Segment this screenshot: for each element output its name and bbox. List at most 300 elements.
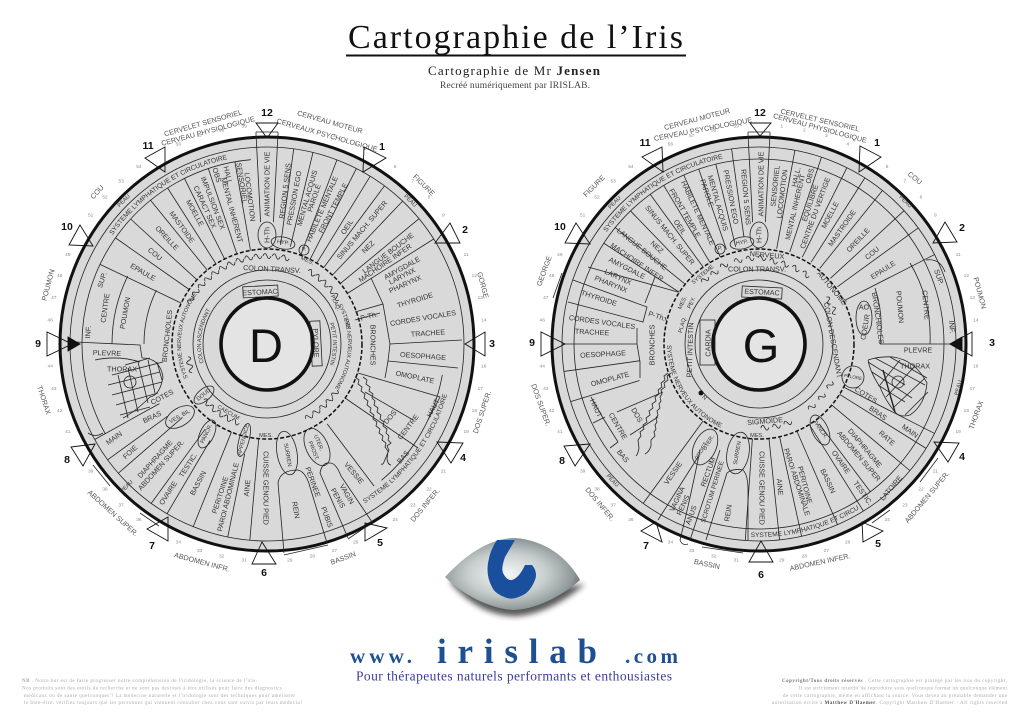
hour numbers: 3 xyxy=(989,337,995,349)
zone labels: organs: CARDIA xyxy=(704,329,712,357)
collarette wave xyxy=(700,255,838,431)
disclaimer note: NB . Notre but est de faire progresser notre compréhension de l'iridologie, la science de l'iris. xyxy=(22,679,257,684)
minute numbers: 46 xyxy=(48,318,53,324)
zone labels: organs: TRACHEE xyxy=(575,327,610,337)
minute numbers: 9 xyxy=(442,212,445,218)
minute numbers: 41 xyxy=(557,429,563,435)
zone labels: organs: SUP. xyxy=(932,268,946,286)
minute numbers: 29 xyxy=(779,557,785,563)
minute numbers: 13 xyxy=(478,295,483,301)
hour numbers: 2 xyxy=(462,224,468,236)
zone labels: organs: CENTRE xyxy=(607,411,629,441)
zone labels: organs: AUTONOME xyxy=(815,269,849,307)
outer region labels: DOS INFER. xyxy=(583,485,617,523)
hour triangles xyxy=(47,123,485,564)
zigzag descending colon lines xyxy=(355,377,391,465)
brand URL xyxy=(350,632,678,671)
hour numbers: 8 xyxy=(559,455,565,467)
minute numbers: 3 xyxy=(825,133,828,139)
outer region labels: CERVEAU PSYCHOLOGIQUE xyxy=(653,115,753,143)
zone labels: small: SURREN xyxy=(733,441,743,465)
minute numbers: 21 xyxy=(441,469,446,475)
zone labels: organs: MACHOIRE INFER xyxy=(609,241,665,283)
minute numbers: 3 xyxy=(333,133,336,139)
minute numbers: 26 xyxy=(353,540,359,546)
credit line: Recréé numériquement par IRISLAB. xyxy=(440,81,590,91)
zone labels: organs: H-Th xyxy=(262,227,272,243)
hour numbers: 5 xyxy=(377,537,383,549)
minute numbers: 26 xyxy=(845,540,851,546)
zone labels: organs: OESOPHAGE xyxy=(580,348,626,360)
zone labels: organs: HABILETE MENTALE xyxy=(679,179,717,247)
zone labels: small: APPENDICE xyxy=(237,423,251,456)
zone labels: small: DOUD xyxy=(196,387,212,403)
zone labels: organs: AMYGDALE xyxy=(382,254,422,282)
zone labels: organs: PERINEE xyxy=(303,466,323,499)
minute numbers: 2 xyxy=(311,127,314,133)
zone labels: organs: CUISSE GENOU PIED xyxy=(262,451,270,525)
zone labels: organs: CENTRE xyxy=(395,412,421,441)
pupil letter G: G xyxy=(743,319,779,372)
zone labels: organs: COEUR xyxy=(858,313,872,341)
zone labels: organs: LANGUE BOUCHE xyxy=(615,226,669,272)
minute numbers: 58 xyxy=(711,127,717,133)
outer region labels: ABDOMEN SUPER. xyxy=(903,469,951,525)
outer region labels: ABDOMEN INFR. xyxy=(173,550,231,574)
outer region labels: BASSIN xyxy=(693,557,721,571)
arc labels: SYSTEME NERVEUX AUTONOME xyxy=(335,304,352,390)
minute numbers: 56 xyxy=(668,141,673,147)
minute numbers: 31 xyxy=(242,557,247,563)
outer region labels: CERVEAU PHYSIOLOGIQUE xyxy=(160,114,256,148)
zone labels: organs: OBS xyxy=(210,166,224,184)
copyright note: Il est strictement interdit de reproduire sous quelconque format un quelconque élément xyxy=(799,686,1008,692)
minute numbers: 42 xyxy=(57,408,63,414)
zone labels: organs: ESTOMAC xyxy=(744,287,780,297)
zone labels: organs: SUP. xyxy=(95,271,109,289)
zone labels: small: PEY. xyxy=(687,296,697,310)
minute numbers: 2 xyxy=(803,127,806,133)
hour numbers: 5 xyxy=(875,538,881,550)
thorax hatch xyxy=(868,357,928,416)
minute numbers: 7 xyxy=(412,178,415,184)
hour numbers: 6 xyxy=(261,567,267,579)
minute numbers: 48 xyxy=(57,273,63,279)
zone labels: organs xyxy=(568,151,957,526)
zone labels: small: PYLORE xyxy=(843,373,863,381)
sector spokes xyxy=(95,132,434,540)
zigzag descending colon lines xyxy=(636,373,671,456)
zone labels: organs: OMOPLATE xyxy=(395,369,435,386)
minute numbers: 33 xyxy=(197,548,203,554)
arc labels: SYSTEME LYMPHATIQUE ET CIRCULATOIRE xyxy=(110,154,227,234)
minute numbers: 52 xyxy=(102,195,108,201)
zone labels: organs: P-Th. xyxy=(647,309,667,323)
brand URL: www. xyxy=(350,644,412,668)
zone labels: organs: PAROI ABDOMINALE xyxy=(215,461,241,532)
zone labels: small xyxy=(677,239,863,465)
minute numbers: 6 xyxy=(394,164,397,170)
zone labels: organs: OREILLE xyxy=(844,226,872,254)
zone labels: organs: OEIL xyxy=(339,218,355,236)
minute numbers: 42 xyxy=(549,408,555,414)
minute numbers: 32 xyxy=(219,554,225,560)
zone labels: organs: AINE xyxy=(242,479,252,497)
minute numbers: 47 xyxy=(543,295,549,301)
zone labels: organs: HABILETE MENTALE xyxy=(304,175,340,243)
zone labels: organs: MOELLE xyxy=(819,200,841,230)
minute numbers: 27 xyxy=(824,548,829,554)
zone labels: organs: THYROIDE xyxy=(396,290,434,310)
minute numbers: 31 xyxy=(734,557,739,563)
zone labels: small: P. xyxy=(718,246,723,252)
zone labels: organs: SCROTUM PERINEE xyxy=(700,460,726,524)
minute numbers: 24 xyxy=(884,517,890,523)
zone labels: organs: LARYNX xyxy=(387,265,417,287)
hour numbers xyxy=(35,107,495,579)
minute numbers: 9 xyxy=(934,212,937,218)
arc labels: PEAU xyxy=(607,195,623,211)
hour numbers: 1 xyxy=(379,141,385,153)
zone labels: organs: NERVEUX xyxy=(749,249,785,261)
minute numbers: 34 xyxy=(668,540,673,546)
minute numbers: 48 xyxy=(549,273,555,279)
outer region labels xyxy=(529,106,989,573)
zone labels: organs: H-Th xyxy=(754,227,764,243)
minute numbers: 53 xyxy=(118,178,124,184)
minute numbers: 33 xyxy=(689,548,695,554)
minute numbers: 14 xyxy=(481,318,487,324)
minute numbers: 59 xyxy=(734,124,739,130)
minute numbers: 54 xyxy=(628,164,634,170)
arc labels: PETIT INTESTIN xyxy=(330,322,337,366)
zone labels: organs: THYROIDE xyxy=(580,288,618,308)
minute numbers: 12 xyxy=(472,273,477,279)
minute numbers: 6 xyxy=(886,164,889,170)
outer region labels: THORAX xyxy=(967,399,985,431)
title underline xyxy=(346,54,686,56)
zone labels: organs xyxy=(83,151,457,532)
zone labels: organs: PRESSION EGO xyxy=(285,170,304,226)
outer region labels: COU xyxy=(88,183,106,201)
zone labels: organs: FOIE xyxy=(121,443,139,461)
thorax hatch xyxy=(108,358,163,418)
zone labels: organs: BAS xyxy=(615,448,631,465)
collarette wave xyxy=(185,254,341,426)
minute numbers: 4 xyxy=(354,141,357,147)
zone labels: organs: REIN xyxy=(290,501,302,519)
pupil ring xyxy=(221,298,313,390)
zone labels: organs: REIN xyxy=(722,504,734,522)
minute numbers: 17 xyxy=(478,386,483,392)
zone labels: organs: PHARYNX xyxy=(593,273,629,295)
arc labels xyxy=(110,154,447,503)
minute numbers: 24 xyxy=(392,517,398,523)
zone labels: organs: OVAIRE xyxy=(830,449,852,476)
copyright note: Copyright/Tous droits réservés . Cette cartographie est protégé par les lois du copyright. xyxy=(782,679,1007,684)
zone labels: small xyxy=(169,239,352,467)
outer region labels: CERVELET SENSORIEL xyxy=(780,107,860,133)
outer region labels: CERVELET SENSORIEL xyxy=(163,108,243,138)
hour numbers: 10 xyxy=(61,221,73,233)
outer region labels: CERVEAUX PSYCHOLOGIQUE xyxy=(276,116,379,154)
minute numbers: 21 xyxy=(933,469,938,475)
zone labels: organs: OVAIRE xyxy=(157,479,179,507)
zone labels: organs: VESSIE xyxy=(342,460,366,486)
zone labels: organs: NEZ xyxy=(360,238,377,255)
zone labels: small: MES. xyxy=(677,295,689,310)
disclaimer note: médicaux ou de santé quelconques'? La médecine naturelle et l'iridologie sont des techniques pour améliorer xyxy=(24,694,295,699)
minute numbers: 46 xyxy=(540,318,545,324)
zone labels: organs: MENTAL ACQUIS xyxy=(706,174,730,232)
zone labels: organs: ESTOMAC xyxy=(242,287,278,297)
zone labels: organs: FRONT TEMPLE xyxy=(316,181,350,235)
zone labels: organs: PLEVRE xyxy=(904,346,932,354)
zone labels: organs: PAROI ABDOMINALE xyxy=(782,447,812,517)
outer region labels: DOS SUPER. xyxy=(471,390,493,434)
zone labels: organs: COTES xyxy=(853,385,879,405)
zone labels: organs: SENSORIEL xyxy=(768,165,782,207)
zone labels: organs: DIAPHRAGME xyxy=(135,438,175,480)
minute numbers xyxy=(540,124,979,563)
zone labels: organs: PERITOINE xyxy=(796,465,814,505)
zone labels: organs: PLEVRE xyxy=(93,348,122,358)
hour numbers: 7 xyxy=(643,540,649,552)
zone labels: small: PEY. xyxy=(343,318,352,332)
minute numbers: 17 xyxy=(970,386,975,392)
minute numbers: 41 xyxy=(65,429,71,435)
outer region labels: DOS SUPER. xyxy=(529,383,553,427)
outer region labels: THORAX xyxy=(35,384,53,416)
zone labels: small: MES. xyxy=(300,255,315,267)
minute numbers: 51 xyxy=(580,212,586,218)
disclaimer note: Nos produits sont des outils de recherche et ne sont pas destinés à être utilisés pour faire des diagnostics xyxy=(22,686,282,692)
minute numbers: 27 xyxy=(332,548,337,554)
zone labels: organs: OEIL xyxy=(672,218,688,236)
minute numbers: 18 xyxy=(472,408,477,414)
minute numbers: 36 xyxy=(136,517,142,523)
hour numbers: 9 xyxy=(529,337,535,349)
zone labels: organs: ANIMATION DE VIE xyxy=(756,151,766,216)
zone labels: organs: MAIN xyxy=(104,429,124,447)
zone labels: organs: BASSIN xyxy=(188,469,208,497)
outer region labels: CERVEAU PHYSIOLOGIQUE xyxy=(772,111,868,145)
zone labels: organs: POUMON xyxy=(894,290,906,324)
outer region labels: DOS INFER. xyxy=(408,486,442,524)
zone labels: organs: SIGMOIDE xyxy=(747,415,783,427)
zone labels: organs: CARACT SEX xyxy=(192,184,219,230)
zone labels: organs: COLON DESCENDANT xyxy=(822,301,844,379)
minute numbers: 53 xyxy=(610,178,616,184)
hour numbers: 10 xyxy=(554,221,566,233)
minute numbers: 11 xyxy=(956,252,961,258)
zone labels: organs: BRONCHIOLES xyxy=(870,291,886,345)
zone labels: organs: PUBIS xyxy=(319,505,335,529)
zone labels: organs: FRONT TEMPLE xyxy=(667,187,703,239)
zone labels: organs: HAUT xyxy=(424,397,442,419)
minute numbers: 1 xyxy=(288,124,291,130)
zone labels: organs: P-Th. xyxy=(359,309,379,323)
minute numbers: 34 xyxy=(176,540,181,546)
arc labels: COLON ASCENDANT xyxy=(197,308,210,364)
minute numbers: 36 xyxy=(628,517,634,523)
minute numbers: 49 xyxy=(65,252,71,258)
zone labels: organs: MASTROIDE xyxy=(826,208,858,248)
minute numbers: 23 xyxy=(410,503,416,509)
zone labels: small: CAECUM xyxy=(216,404,240,422)
zone labels: organs: BRAS xyxy=(867,404,889,422)
zone labels: organs: RATE xyxy=(877,428,897,448)
outer region labels: GORGE xyxy=(475,271,491,299)
arc labels: PEAU xyxy=(605,473,619,489)
minute numbers: 8 xyxy=(428,195,431,201)
outer region labels: ABDOMEN SUPER. xyxy=(86,488,140,538)
zone labels: organs: MENTAL INHERENT xyxy=(783,173,807,241)
zone labels: organs: REGION 5 SENS xyxy=(277,162,293,219)
zone labels: small: MES. xyxy=(750,433,764,439)
arc labels: SYSTEME LYMPHATIQUE ET CIRCULATOIRE xyxy=(604,154,723,232)
zone labels: organs: THORAX xyxy=(107,364,137,374)
hour triangles xyxy=(541,123,972,562)
minute numbers: 28 xyxy=(802,554,807,560)
zone labels: organs: EPAULE xyxy=(869,259,897,281)
minute numbers: 19 xyxy=(955,429,961,435)
zone labels: small: PANCR. xyxy=(200,423,214,445)
minute numbers: 23 xyxy=(902,503,908,509)
minute numbers: 39 xyxy=(580,469,586,475)
subtitle: Cartographie de Mr Jensen xyxy=(428,63,601,78)
zone labels: organs: PENIS xyxy=(329,486,347,510)
minute numbers: 56 xyxy=(176,141,181,147)
arc labels: PEAU xyxy=(119,479,135,495)
minute numbers: 4 xyxy=(846,141,849,147)
minute numbers: 16 xyxy=(973,363,979,369)
zone labels: organs: TRACHEE xyxy=(411,327,446,339)
zone labels: small: VES. BIL xyxy=(169,409,191,425)
minute numbers: 49 xyxy=(557,252,563,258)
estomac and pylore boxes xyxy=(243,285,322,366)
zone labels: organs: DOS xyxy=(629,406,645,424)
zone labels: organs: PYLORE xyxy=(311,328,321,358)
zone labels: organs: CENTRE DU VERTIGE xyxy=(798,176,832,250)
zone labels: organs: PHARYNX xyxy=(387,273,423,295)
outer region labels: POUMON xyxy=(39,268,57,302)
minute numbers: 43 xyxy=(543,386,549,392)
minute numbers: 59 xyxy=(242,124,247,130)
hour numbers: 12 xyxy=(754,107,766,119)
outer region labels: COU xyxy=(906,170,924,186)
minute numbers: 47 xyxy=(51,295,57,301)
zone labels: organs: COLON TRANSV. xyxy=(243,263,301,275)
minute numbers: 16 xyxy=(481,363,487,369)
zone labels: organs: SENSORIEL xyxy=(234,162,250,204)
zone labels: small: PROST. xyxy=(694,440,710,461)
disc and rings xyxy=(552,137,966,551)
zone labels: small: SURREN xyxy=(282,443,292,467)
arc labels: SYSTEME NERVEUX AUTONOME xyxy=(667,346,722,428)
arc labels: PEAU xyxy=(954,380,964,396)
zone labels: organs: HALL xyxy=(222,165,234,185)
zone labels: organs: SINUS MACH. SUPER xyxy=(643,203,697,267)
minute numbers: 44 xyxy=(540,363,545,369)
zone labels: organs: CENTRE xyxy=(98,293,112,323)
zone labels: organs: THORAX xyxy=(900,362,930,370)
zone labels: organs: BRONCHES xyxy=(648,324,656,365)
hour numbers: 8 xyxy=(64,454,70,466)
zone labels: small: HYP. xyxy=(735,239,749,247)
minute numbers: 7 xyxy=(904,178,907,184)
zone labels: organs: PRESSION EGO xyxy=(721,169,741,225)
zone labels: small: MES. xyxy=(259,433,273,439)
minute numbers: 57 xyxy=(689,133,695,139)
minute numbers: 43 xyxy=(51,386,57,392)
zone labels: small: PLAQ. xyxy=(678,316,688,334)
outer region labels: POUMON xyxy=(971,276,989,310)
copyright note: autorisation écrite à Matthew D'Haemer. Copyright Matthew D'Haemer - All rights reserved xyxy=(772,701,1008,706)
minute numbers: 52 xyxy=(594,195,600,201)
pupil letter D: D xyxy=(249,319,283,372)
outer region labels: FIGURE xyxy=(581,173,607,199)
zone labels: organs: ABDOMEN SUPER xyxy=(835,429,883,483)
zone labels: organs: OMOPLATE xyxy=(590,370,630,388)
zone labels: organs: DIAPHRAGME xyxy=(846,427,884,470)
disclaimer note: le bien-être. vérifiez toujours que les personnes qui viennent consulter chez vous sont suivis par leurs médecin! xyxy=(24,701,302,706)
black marker dot xyxy=(698,390,704,396)
zone labels: organs: LOCOMOTION xyxy=(243,172,257,222)
panel: left iris chart D xyxy=(35,107,495,579)
minute numbers: 19 xyxy=(463,429,469,435)
hour numbers xyxy=(529,107,995,581)
arc labels: SYSTEME NERVEUX AUTONOME xyxy=(177,292,197,379)
hour numbers: 1 xyxy=(874,137,880,149)
zone labels: small: P. xyxy=(302,247,307,253)
zone labels: small: PANCR. xyxy=(812,420,829,441)
outer region labels: CERVEAU MOTEUR xyxy=(296,108,364,136)
title: Cartographie de l’Iris xyxy=(348,19,683,56)
zone labels: organs: BRONCHES xyxy=(368,325,378,366)
minute numbers: 58 xyxy=(219,127,225,133)
zone labels: organs: AO xyxy=(859,302,870,312)
hour numbers: 11 xyxy=(142,140,154,152)
zone labels: organs: CUISSE GENOU PIED xyxy=(758,451,766,525)
minute numbers: 12 xyxy=(964,273,969,279)
zone labels: organs: VESSIE xyxy=(662,460,684,486)
zone labels: organs: VAGIN xyxy=(338,482,356,506)
zone labels: organs: LOCOMOTION xyxy=(775,169,789,219)
zone labels: organs: PAROLE xyxy=(698,178,716,208)
minute numbers: 14 xyxy=(973,318,979,324)
sector spokes xyxy=(562,132,935,541)
logo: eye xyxy=(445,538,585,616)
outer region labels xyxy=(35,108,493,574)
zone labels: organs: INF. xyxy=(947,320,957,334)
minute numbers: 37 xyxy=(610,503,616,509)
hour numbers: 7 xyxy=(149,540,155,552)
minute numbers: 44 xyxy=(48,363,53,369)
zone labels: organs: AINE xyxy=(775,478,785,496)
minute numbers: 1 xyxy=(780,124,783,130)
zone labels: small: UTER. xyxy=(312,434,324,452)
zone labels: organs: EPAULE xyxy=(129,261,157,283)
minute numbers: 57 xyxy=(197,133,203,139)
disc and rings xyxy=(16,93,518,595)
zone labels: organs: MENTAL INHERENT xyxy=(219,176,245,244)
arc labels: SYSTEME LYMPHATIQUE ET CIRCU xyxy=(751,505,858,537)
minute numbers: 38 xyxy=(102,486,108,492)
hour numbers: 11 xyxy=(639,137,651,149)
zone labels: organs: PENIS xyxy=(674,493,692,517)
outer region labels: ABDOMEN INFER. xyxy=(789,551,851,573)
